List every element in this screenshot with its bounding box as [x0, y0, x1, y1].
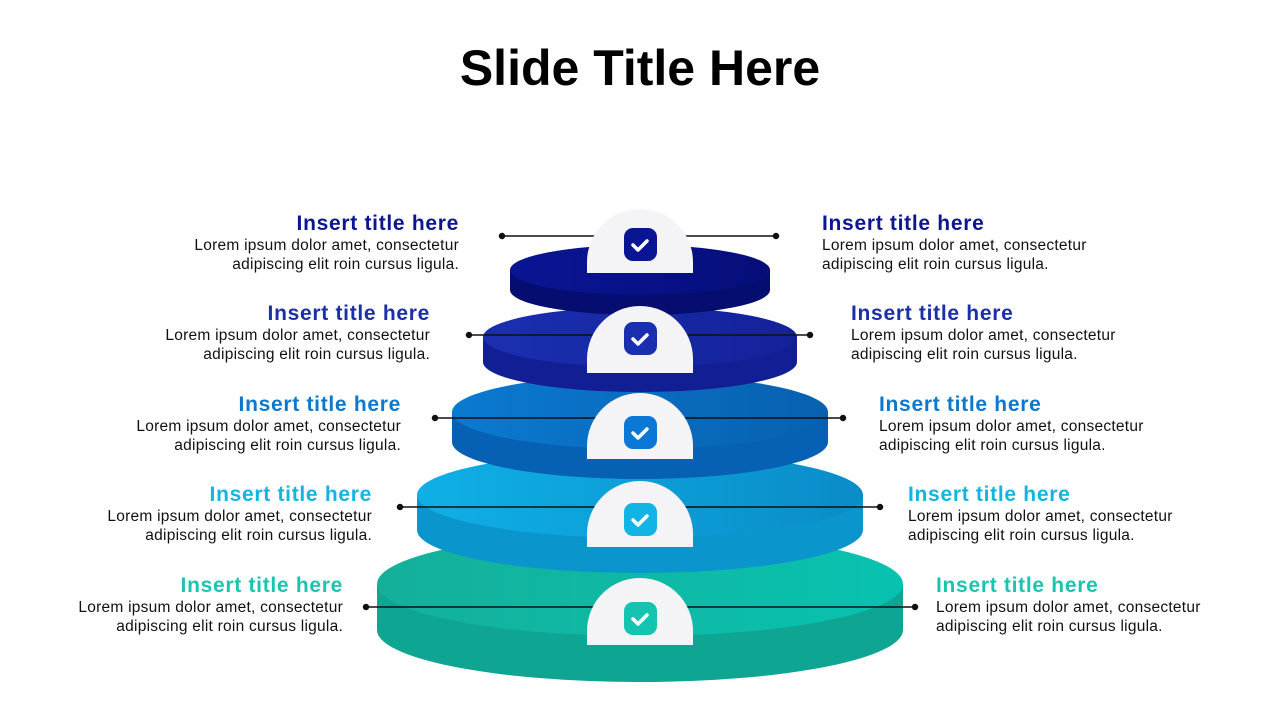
connector lines [364, 234, 918, 610]
left text 2: adipiscing elit roin cursus ligula. [203, 346, 430, 363]
badge 2 [587, 306, 693, 373]
left text 4: Lorem ipsum dolor amet, consectetur [107, 508, 372, 525]
left text 4: adipiscing elit roin cursus ligula. [145, 527, 372, 544]
left text 5: adipiscing elit roin cursus ligula. [116, 618, 343, 635]
right text 4 [908, 483, 1173, 544]
left text 2: Lorem ipsum dolor amet, consectetur [165, 327, 430, 344]
badge 5 [587, 578, 693, 645]
left text 1: Insert title here [297, 212, 459, 235]
badge 3 [587, 393, 693, 459]
disk 2 [483, 307, 797, 392]
left text 5: Insert title here [181, 574, 343, 597]
right text 4: adipiscing elit roin cursus ligula. [908, 527, 1135, 544]
right text 5: Insert title here [936, 574, 1098, 597]
right text 3: adipiscing elit roin cursus ligula. [879, 437, 1106, 454]
right text 5: Lorem ipsum dolor amet, consectetur [936, 599, 1201, 616]
right text 4: Insert title here [908, 483, 1070, 506]
right text 2 [851, 302, 1116, 363]
left text 2 [165, 302, 430, 363]
left text 1: Lorem ipsum dolor amet, consectetur [194, 237, 459, 254]
left text 3: adipiscing elit roin cursus ligula. [174, 437, 401, 454]
disk 3 [452, 375, 828, 479]
left text 2: Insert title here [268, 302, 430, 325]
left text 3: Lorem ipsum dolor amet, consectetur [136, 418, 401, 435]
right text 2: Insert title here [851, 302, 1013, 325]
right text 1: Lorem ipsum dolor amet, consectetur [822, 237, 1087, 254]
right text 5 [936, 574, 1201, 635]
right text 1: Insert title here [822, 212, 984, 235]
right text 3 [879, 393, 1144, 454]
right text 3: Insert title here [879, 393, 1041, 416]
right text 1 [822, 212, 1087, 273]
right text 3: Lorem ipsum dolor amet, consectetur [879, 418, 1144, 435]
disk 5 [377, 532, 903, 682]
badge 1 [587, 209, 693, 273]
left text 4 [107, 483, 372, 544]
right text 4: Lorem ipsum dolor amet, consectetur [908, 508, 1173, 525]
left text 1 [194, 212, 459, 273]
right text 5: adipiscing elit roin cursus ligula. [936, 618, 1163, 635]
left text 5 [78, 574, 343, 635]
disk 4 [417, 452, 863, 573]
right text 2: adipiscing elit roin cursus ligula. [851, 346, 1078, 363]
right text 1: adipiscing elit roin cursus ligula. [822, 256, 1049, 273]
left text 5: Lorem ipsum dolor amet, consectetur [78, 599, 343, 616]
right text 2: Lorem ipsum dolor amet, consectetur [851, 327, 1116, 344]
left text 4: Insert title here [210, 483, 372, 506]
title: Slide Title Here [460, 40, 820, 96]
left text 3: Insert title here [239, 393, 401, 416]
disk 1 [510, 245, 770, 315]
left text 1: adipiscing elit roin cursus ligula. [232, 256, 459, 273]
left text 3 [136, 393, 401, 454]
badge 4 [587, 481, 693, 547]
